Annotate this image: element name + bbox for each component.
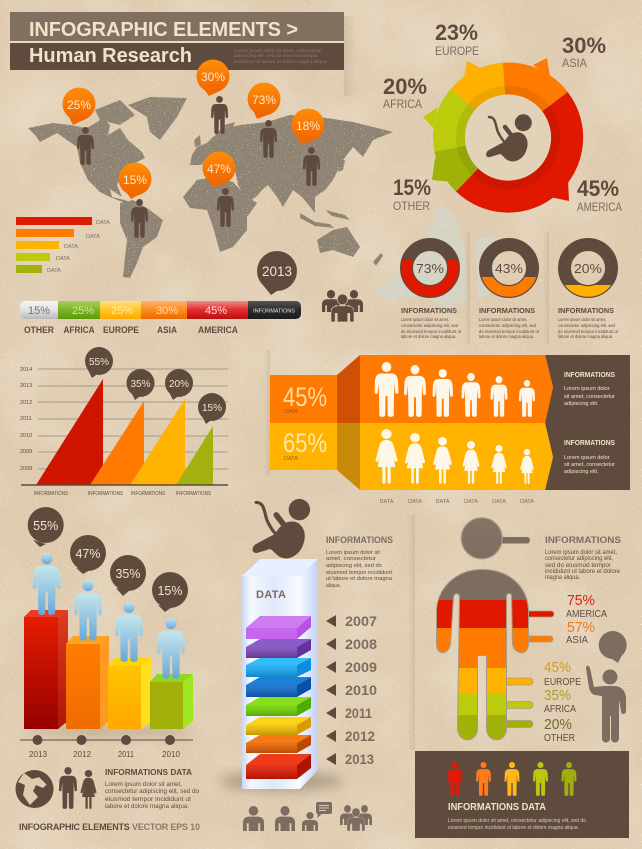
pin: person 30%: 30% (201, 70, 225, 84)
banner text bottom: INFORMATIONS (564, 440, 615, 447)
year list with arrows: 2011 (345, 705, 372, 721)
donut labels: 30% (562, 33, 606, 58)
chart bubble 20%: 20% (169, 379, 189, 390)
chart bubble 35%: 35% (130, 379, 151, 390)
body colour bands (437, 570, 528, 740)
icon: presenter with speech bubble (586, 631, 627, 742)
data panel with coloured people: INFORMATIONS DATA (448, 802, 546, 813)
data panel with coloured people: Lorem ipsum dolor sit amet, consectetur adipiscing elit, sed do (448, 818, 586, 824)
small donut 73%: INFORMATIONS (401, 308, 457, 315)
donut labels: 45% (577, 176, 619, 201)
chart bubble 15% (198, 393, 226, 424)
small donut 43%: do eiusmod tempor incididunt ut (479, 329, 540, 334)
pin: person 47% (202, 152, 236, 227)
tube informations text: eiusmod tempor incididunt (326, 570, 392, 576)
horizontal data bars: DATA (56, 256, 70, 262)
donut chart (423, 58, 583, 213)
small donut 20%: INFORMATIONS (558, 308, 614, 315)
bar bubble 55%: 55% (33, 519, 58, 533)
chart bubble 20% (165, 369, 193, 400)
body percentages: 75% (567, 592, 595, 609)
banner text bottom: Lorem ipsum dolor (564, 455, 610, 461)
body connectors (503, 611, 554, 728)
layer 2010 (246, 697, 311, 716)
triangle chart (20, 367, 228, 497)
informations data text: INFORMATIONS DATA (105, 767, 192, 777)
legend pill: 30% (156, 305, 178, 317)
tube informations text: aliqua. (326, 583, 341, 589)
body percentages: AFRICA (544, 704, 576, 715)
small donut 73% (401, 244, 462, 339)
stat 65%: 65% (283, 428, 327, 458)
pin: person 30% (196, 60, 230, 134)
data panel with coloured people: eiusmod tempor incididunt ut labore et dolore magna aliqua. (448, 825, 579, 831)
chart year axis (20, 367, 32, 472)
banner text top: INFORMATIONS (564, 372, 615, 379)
row of women (376, 429, 534, 484)
year list with arrows: 2009 (345, 659, 377, 675)
icon: group (340, 805, 372, 831)
legend labels (24, 325, 238, 335)
body percentages: 35% (544, 687, 571, 704)
legend pill: 15% (28, 305, 50, 317)
pin: person 25% (62, 88, 96, 165)
body percentages: OTHER (544, 733, 575, 744)
subtitle: Human Research (29, 45, 192, 67)
header small text (234, 48, 328, 64)
donut labels: AMERICA (577, 200, 622, 214)
bottom people icons (243, 802, 372, 831)
banner text top: Lorem ipsum dolor (564, 386, 610, 392)
human body chart (430, 518, 554, 745)
small donut 20% (558, 244, 619, 339)
glass tube of stacked layers: DATA (256, 589, 286, 601)
chart bubble 55% (85, 347, 113, 378)
donut labels: 20% (383, 74, 427, 99)
small donut 73%: consectetur adipiscing elit, sed (401, 323, 458, 328)
title: INFOGRAPHIC ELEMENTS > (29, 19, 298, 41)
icon: baby (486, 114, 532, 161)
donut labels: 23% (435, 20, 478, 45)
legend pill: 45% (205, 305, 227, 317)
banner text bottom: sit amet, consectetur (564, 462, 615, 468)
horizontal data bars (16, 217, 110, 274)
banner data labels: DATA (492, 499, 506, 505)
tube informations text: Lorem ipsum dolor sit (326, 550, 380, 556)
legend pill: 25% (72, 305, 94, 317)
footer credit: INFOGRAPHIC ELEMENTS VECTOR EPS 10 (19, 822, 200, 832)
banner data labels: DATA (436, 499, 450, 505)
informations data text: Lorem ipsum dolor sit amet, (105, 782, 182, 788)
legend pill: 25% (111, 305, 133, 317)
year bubble 2013 (257, 251, 297, 295)
layer 2013 (246, 754, 311, 779)
small donut 43%: consectetur adipiscing elit, sed (479, 323, 536, 328)
year list with arrows: 2008 (345, 636, 377, 652)
men and women banner (270, 355, 630, 490)
timeline (20, 735, 193, 759)
donut labels: EUROPE (435, 44, 479, 58)
horizontal data bars: DATA (64, 244, 78, 250)
body percentages: 57% (567, 619, 595, 636)
pin: person 73% (248, 82, 280, 158)
banner data labels: DATA (464, 499, 478, 505)
banner text top: sit amet, consectetur (564, 394, 615, 400)
chart year axis: 2012 (20, 400, 32, 406)
header small text: incididunt ut labore et dolore magna aliqua. (234, 59, 328, 64)
donut labels: 15% (393, 175, 431, 200)
tube informations text: INFORMATIONS (326, 535, 393, 545)
banner data labels (380, 499, 534, 505)
body informations text: consectetur adipiscing elit, (545, 556, 613, 562)
row of men (374, 362, 535, 417)
layer 2011 (246, 717, 311, 735)
small donut 73%: Lorem ipsum dolor sit amet, (401, 317, 449, 322)
body percentages: AMERICA (566, 609, 607, 620)
small donut 43% (479, 244, 540, 339)
chart bubble 55%: 55% (89, 357, 109, 368)
blue figures on bars (33, 553, 185, 679)
pin: person 15%: 15% (123, 173, 147, 187)
triangle chart: INFORMATIONS (88, 491, 124, 497)
icon: man (59, 767, 77, 809)
icon: woman (80, 770, 97, 809)
bar bubble 47% (70, 535, 106, 574)
banner text bottom (564, 440, 615, 475)
bar bubble 15% (152, 572, 188, 612)
timeline: 2011 (118, 750, 135, 759)
banner text bottom: adipiscing elit. (564, 469, 599, 475)
legend labels: AMERICA (198, 325, 238, 335)
stat 45%: 45% (283, 382, 327, 412)
banner data labels: DATA (408, 499, 422, 505)
glass tube of stacked layers (220, 559, 344, 791)
bar 2010 (150, 674, 193, 729)
donut labels: OTHER (393, 199, 430, 213)
small donut 20%: labore et dolore magna aliqua. (558, 334, 613, 339)
bar bubble 15%: 15% (157, 584, 183, 598)
chart year axis: 2009 (20, 449, 32, 455)
header small text: adipiscing elit, sed do eiusmod tempor (234, 53, 319, 58)
layer 2008 (246, 658, 311, 677)
timeline: 2010 (162, 750, 181, 759)
donut labels: ASIA (562, 56, 587, 70)
year list with arrows (326, 613, 377, 767)
tube informations text: adipiscing elit, sed do (326, 563, 382, 569)
triangle chart: INFORMATIONS (176, 491, 212, 497)
legend labels: AFRICA (64, 325, 95, 335)
informations data text (105, 767, 200, 810)
tube informations text: ut labore et dolore magna (326, 576, 393, 582)
horizontal data bars: DATA (86, 234, 100, 240)
horizontal data bars: DATA (47, 268, 61, 274)
body percentages (544, 592, 607, 744)
stat 65%: DATA (284, 456, 298, 462)
bar bubble 35% (110, 555, 146, 596)
donut labels: AFRICA (383, 97, 422, 111)
pin: person 25%: 25% (67, 98, 91, 112)
informations data text: consectetur adipiscing elit, sed do (105, 789, 200, 795)
data panel with coloured people (415, 751, 629, 838)
informations data text: labore et dolore magna aliqua. (105, 804, 189, 810)
body informations text (545, 535, 621, 581)
body informations text: sed do eiusmod tempor (545, 563, 611, 569)
bar bubble 47%: 47% (75, 547, 101, 561)
small donut 43%: 43% (495, 261, 523, 276)
3D bar chart (23, 553, 193, 736)
body informations text: INFORMATIONS (545, 535, 621, 546)
header banner (10, 12, 344, 70)
chart year axis: 2014 (20, 367, 32, 373)
body percentages: ASIA (566, 635, 588, 646)
body informations text: Lorem ipsum dolor sit amet, (545, 550, 617, 556)
small donut 73%: do eiusmod tempor incididunt ut (401, 329, 462, 334)
small donut 20%: 20% (574, 261, 602, 276)
horizontal data bars: DATA (96, 220, 110, 226)
banner text top (564, 372, 615, 407)
chart year axis: 2011 (20, 416, 32, 422)
body percentages: 20% (544, 716, 572, 733)
icon: people group (322, 290, 363, 322)
icon: globe (16, 770, 54, 808)
year list with arrows: 2010 (345, 682, 377, 698)
timeline: 2013 (29, 750, 48, 759)
banner data labels: DATA (520, 499, 534, 505)
donut labels (383, 20, 622, 214)
bar 2011 (108, 658, 151, 729)
small donut 20%: do eiusmod tempor incididunt ut (558, 329, 619, 334)
legend labels: EUROPE (103, 325, 139, 335)
layer 2007 (246, 639, 311, 658)
informations data text: eiusmod tempor incididunt ut (105, 797, 191, 803)
world map (28, 97, 393, 278)
pin: person 18% (292, 108, 324, 186)
small donut 73%: labore et dolore magna aliqua. (401, 334, 456, 339)
banner data labels: DATA (380, 499, 394, 505)
pin: person 73%: 73% (252, 93, 276, 107)
body head (461, 518, 530, 559)
layer 2009 (246, 677, 311, 697)
pin: person 15% (118, 162, 152, 238)
pin: person 47%: 47% (207, 162, 231, 176)
legend pill (20, 301, 301, 319)
banner text top: adipiscing elit. (564, 401, 599, 407)
icon: large baby on tube (253, 499, 310, 558)
body percentages: EUROPE (544, 677, 581, 688)
chart bubble 35% (126, 369, 154, 400)
small donut 43%: labore et dolore magna aliqua. (479, 334, 534, 339)
triangle chart: INFORMATIONS (131, 491, 166, 497)
header small text: Lorem ipsum dolor sit amet, consectetur (234, 48, 323, 53)
year list with arrows: 2012 (345, 728, 375, 744)
chart year axis: 2010 (20, 433, 32, 439)
bar bubble 35%: 35% (115, 567, 141, 581)
body informations text: magna aliqua. (545, 575, 580, 581)
small donut 20%: consectetur adipiscing elit, sed (558, 323, 615, 328)
bar bubble 55% (28, 507, 64, 547)
legend labels: ASIA (157, 325, 177, 335)
year bubble 2013: 2013 (262, 264, 292, 279)
legend labels: OTHER (24, 325, 54, 335)
small donut 20%: Lorem ipsum dolor sit amet, (558, 317, 606, 322)
year list with arrows: 2007 (345, 613, 377, 629)
timeline: 2012 (73, 750, 92, 759)
body informations text: incididunt ut labore et dolore (545, 569, 621, 575)
triangle chart: INFORMATIONS (34, 491, 69, 497)
bar 2013 (24, 610, 68, 729)
coloured figures (448, 762, 576, 796)
chart year axis: 2008 (20, 466, 32, 472)
chart bubble 15%: 15% (202, 403, 222, 414)
donut spikes (423, 58, 569, 201)
year list with arrows: 2013 (345, 751, 374, 767)
chart year axis: 2013 (20, 383, 32, 389)
pin: person 18%: 18% (296, 119, 320, 133)
small donut 43%: Lorem ipsum dolor sit amet, (479, 317, 527, 322)
stat 45%: DATA (284, 409, 298, 415)
body percentages: 45% (544, 659, 571, 676)
small donut 73%: 73% (416, 261, 444, 276)
tube informations text (326, 535, 393, 589)
bar 2012 (66, 636, 109, 729)
small donut 43%: INFORMATIONS (479, 308, 535, 315)
layer 2012 (246, 735, 311, 753)
layer top (246, 616, 311, 639)
tube informations text: amet, consectetur (326, 556, 376, 562)
legend pill: INFORMATIONS (253, 308, 295, 314)
icon: speech box (316, 802, 332, 818)
